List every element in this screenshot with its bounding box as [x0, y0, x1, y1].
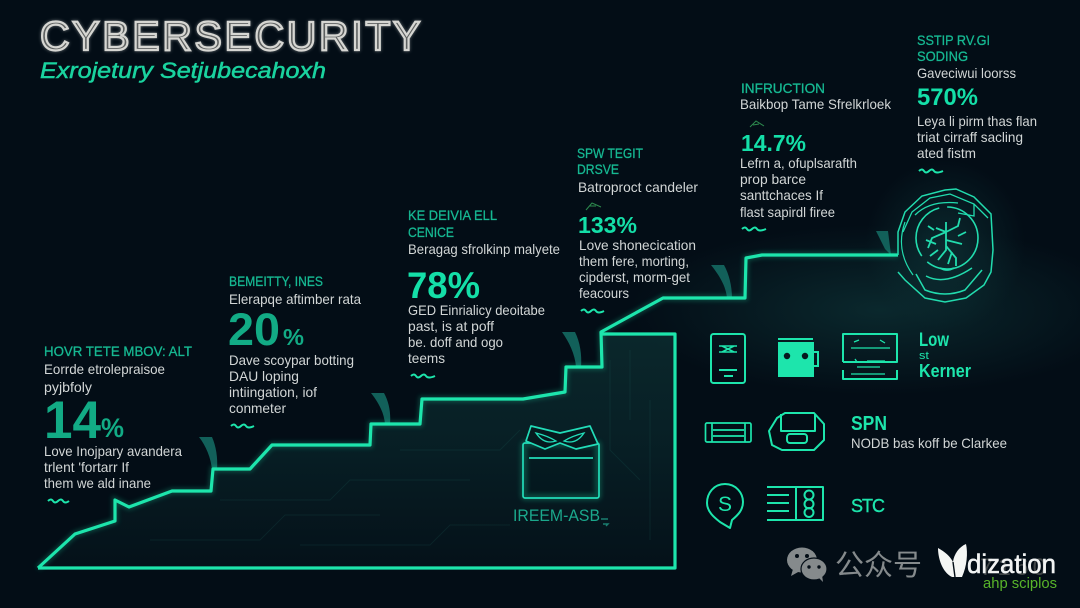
text block: step 1: pyjbfoly	[44, 379, 92, 395]
fin markers	[199, 231, 891, 470]
text block: step 4: feacours	[579, 285, 629, 301]
text block: step 1	[44, 343, 192, 502]
text block: step 3: GED Einrialicy deoitabe	[408, 302, 545, 318]
legend: SPN	[851, 413, 1007, 451]
text block: step 3: Beragag sfrolkinp malyete	[408, 241, 560, 257]
text block: step 2: Elerapqe aftimber rata	[229, 291, 361, 307]
icon: dollar pin	[707, 484, 743, 528]
text block: step 4: 133%	[578, 212, 637, 238]
text block: step 5: Lefrn a, ofuplsarafth	[740, 155, 857, 171]
icon: document	[843, 334, 897, 379]
subtitle: Exrojetury Setjubecahoxh	[40, 58, 326, 83]
text block: step 6	[917, 32, 1037, 172]
text block: step 2: %	[283, 324, 304, 350]
logo: dization: ahp sciplos	[983, 575, 1057, 592]
text block: step 1: Eorrde etrolepraisoe	[44, 361, 165, 377]
text block: step 5: 14.7%	[741, 130, 806, 156]
text block: step 1: 14	[44, 391, 102, 450]
text block: step 1: %	[101, 413, 124, 443]
text block: step 1: HOVR TETE MBOV: ALT	[44, 343, 192, 359]
icon: vault with mask	[523, 426, 599, 498]
text block: step 3: past, is at poff	[408, 318, 494, 334]
text block: step 5: INFRUCTION	[741, 80, 825, 96]
text block: step 4: them fere, morting,	[579, 253, 689, 269]
text block: step 2: Dave scoypar botting	[229, 352, 354, 368]
legend: Low st Kerner: st	[919, 350, 929, 362]
text block: step 4: DRSVE	[577, 161, 619, 177]
watermark: WeChat official account	[787, 548, 1046, 582]
text block: step 4: SPW TEGIT	[577, 145, 643, 161]
text block: step 3: KE DEIVIA ELL	[408, 207, 497, 223]
icon: hexagon case	[769, 413, 824, 450]
text block: step 3: 78%	[407, 265, 480, 306]
text block: step 4: Love shonecication	[579, 237, 696, 253]
icon: circular shield badge	[898, 189, 993, 302]
text block: step 6: triat cirraff sacling	[917, 129, 1023, 145]
icon: phone	[711, 334, 745, 383]
text block: step 5: santtchaces If	[740, 187, 823, 203]
vault label: IREEM-ASB	[513, 506, 600, 525]
staircase chart	[38, 231, 898, 568]
text block: step 3	[407, 207, 560, 378]
icon: dollar pin: S	[718, 493, 732, 516]
text block: step 4: cipderst, morm-get	[579, 269, 690, 285]
text block: step 3: teems	[408, 350, 445, 366]
text block: step 2: intiingation, iof	[229, 384, 317, 400]
text block: step 6: ated fistm	[917, 145, 976, 161]
text block: step 2: 20	[228, 304, 280, 355]
icon: card	[706, 423, 751, 442]
text block: step 2	[228, 273, 361, 428]
text block: step 6: 570%	[917, 84, 978, 111]
text block: step 5: flast sapirdl firee	[740, 204, 835, 220]
text block: step 4	[577, 145, 698, 312]
text block: step 5: Baikbop Tame Sfrelkrloek	[740, 96, 892, 112]
logo: dization	[938, 544, 1057, 592]
legend: Low st Kerner: Low	[919, 330, 949, 351]
watermark: WeChat official account: 7160	[980, 554, 1046, 581]
text block: step 6: SODING	[917, 48, 968, 64]
legend: SPN: NODB bas koff be Clarkee	[851, 435, 1007, 451]
text block: step 2: DAU loping	[229, 368, 299, 384]
text block: step 6: Gaveciwui loorss	[917, 65, 1016, 81]
text block: step 2: conmeter	[229, 400, 286, 416]
watermark: WeChat official account: 公众号	[835, 550, 922, 582]
text block: step 6: Leya li pirm thas flan	[917, 113, 1037, 129]
icon: mug	[778, 339, 818, 377]
text block: step 1: trlent 'fortarr If	[44, 459, 129, 475]
title: CYBERSECURITY	[40, 13, 423, 59]
text block: step 3: CENICE	[408, 224, 454, 240]
text block: step 2: BEMEITTY, INES	[229, 273, 323, 289]
legend: Low st Kerner: Kerner	[919, 361, 971, 381]
legend: Low st Kerner	[919, 330, 971, 381]
text block: step 5	[740, 80, 892, 230]
text block: step 4: Batroproct candeler	[578, 179, 698, 195]
text block: step 5: prop barce	[740, 171, 806, 187]
legend: SPN: SPN	[851, 413, 887, 435]
text block: step 1: them we ald inane	[44, 475, 151, 491]
icon: ledger	[767, 487, 823, 520]
text block: step 3: be. doff and ogo	[408, 334, 503, 350]
logo: dization: dization	[967, 549, 1056, 579]
legend: STC: STC	[851, 496, 885, 516]
text block: step 1: Love Inojpary avandera	[44, 443, 182, 459]
text block: step 6: SSTIP RV.GI	[917, 32, 990, 48]
circuit texture	[150, 350, 650, 545]
